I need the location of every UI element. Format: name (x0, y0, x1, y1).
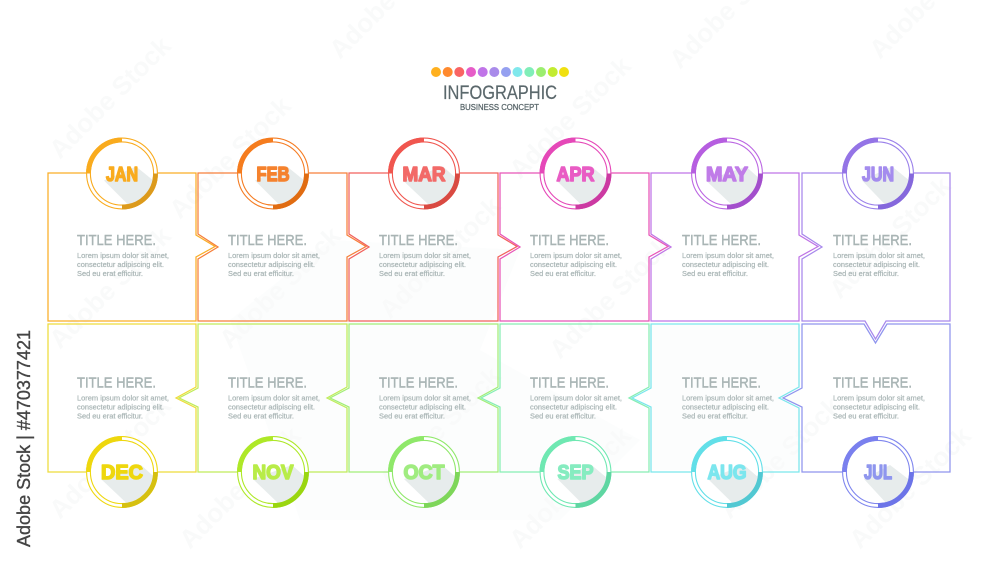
subtitle: BUSINESS CONCEPT (460, 102, 539, 112)
panel: MAR: Sed eu erat efficitur. (379, 269, 445, 278)
panel: JUL: Sed eu erat efficitur. (833, 412, 899, 420)
icon: MAY badge (691, 138, 763, 210)
panel: MAY: consectetur adipiscing elit. (682, 260, 769, 269)
panel: OCT: consectetur adipiscing elit. (379, 402, 466, 412)
icon: JUN badge (842, 138, 914, 210)
background watermark: Adobe Stock (373, 360, 507, 494)
panel: SEP: Lorem ipsum dolor sit amet, (530, 394, 622, 402)
panel: NOV: Lorem ipsum dolor sit amet, (228, 394, 320, 402)
background watermark: Adobe Stock (163, 90, 297, 224)
icon: DEC badge (86, 436, 158, 508)
icon: AUG badge (691, 436, 763, 508)
panel: FEB: Lorem ipsum dolor sit amet, (228, 251, 320, 260)
panel: JAN: consectetur adipiscing elit. (77, 260, 164, 269)
panel: AUG: Lorem ipsum dolor sit amet, (682, 394, 774, 402)
panel: APR: consectetur adipiscing elit. (530, 260, 617, 269)
panel: OCT: TITLE HERE. (379, 374, 458, 392)
panel: JUL: TITLE HERE. (833, 374, 912, 392)
background watermark: Adobe Stock (823, 170, 957, 304)
panel: FEB: TITLE HERE. (228, 232, 307, 249)
panel: FEB (198, 173, 366, 321)
panel: JAN: Sed eu erat efficitur. (77, 269, 143, 278)
background watermark: Adobe Stock (503, 420, 637, 554)
panel: SEP (481, 324, 649, 472)
icon: SEP badge: SEP (558, 462, 594, 484)
icon: MAR badge: MAR (402, 164, 446, 186)
icon: JUL badge (842, 436, 914, 508)
panel: NOV (179, 324, 347, 472)
icon: APR badge: APR (556, 164, 595, 186)
panel: MAR (349, 173, 517, 321)
icon: JAN badge (86, 138, 158, 210)
icon: DEC badge: DEC (101, 462, 143, 484)
background watermark: Adobe Stock (43, 390, 177, 524)
icon: MAR badge (388, 138, 460, 210)
icon: APR badge (540, 138, 612, 210)
panel: JAN (48, 173, 215, 321)
panel: MAY: TITLE HERE. (682, 232, 761, 249)
panel: APR (500, 173, 668, 321)
background watermark: Adobe Stock (843, 420, 977, 554)
icon: JUN badge: JUN (862, 164, 894, 186)
panel: APR: Lorem ipsum dolor sit amet, (530, 251, 622, 260)
panel: MAR: Lorem ipsum dolor sit amet, (379, 251, 471, 260)
panel: JUL (783, 324, 950, 472)
panel: NOV: consectetur adipiscing elit. (228, 402, 315, 412)
panel: JUL: consectetur adipiscing elit. (833, 402, 920, 412)
panel: JUL: Lorem ipsum dolor sit amet, (833, 394, 925, 402)
panel: MAY (651, 173, 818, 321)
panel: MAR: TITLE HERE. (379, 232, 458, 249)
background watermark: Adobe Stock (503, 50, 637, 184)
title: INFOGRAPHIC (443, 83, 557, 104)
panel: SEP: consectetur adipiscing elit. (530, 402, 617, 412)
panel: SEP: TITLE HERE. (530, 374, 609, 392)
icon: NOV badge (237, 436, 309, 508)
panel: JAN: TITLE HERE. (77, 232, 156, 249)
panel: AUG: Sed eu erat efficitur. (682, 412, 748, 420)
icon: NOV badge: NOV (252, 462, 294, 484)
colored dots row (431, 67, 569, 77)
panel: NOV: TITLE HERE. (228, 374, 307, 392)
panel: OCT: Sed eu erat efficitur. (379, 412, 445, 420)
icon: MAY badge: MAY (706, 164, 749, 186)
background watermark: Adobe Stock (173, 420, 307, 554)
panel: DEC: Lorem ipsum dolor sit amet, (77, 394, 169, 402)
panel: MAY: Sed eu erat efficitur. (682, 269, 748, 278)
panel: JUN: TITLE HERE. (833, 232, 912, 249)
background watermark: Adobe Stock (213, 220, 347, 354)
icon: OCT badge (388, 436, 460, 508)
panel: DEC (48, 324, 196, 472)
icon: AUG badge: AUG (708, 462, 746, 484)
panel: AUG (632, 324, 799, 472)
panel: FEB: consectetur adipiscing elit. (228, 260, 315, 269)
stock credit: Adobe Stock | #470377421 (14, 330, 34, 547)
icon: FEB badge: FEB (256, 164, 290, 186)
panel: DEC: Sed eu erat efficitur. (77, 412, 143, 420)
panel: MAY: Lorem ipsum dolor sit amet, (682, 251, 774, 260)
panel: AUG: consectetur adipiscing elit. (682, 402, 769, 412)
panel: FEB: Sed eu erat efficitur. (228, 269, 294, 278)
panel: JUN: Sed eu erat efficitur. (833, 269, 899, 278)
panel: OCT: Lorem ipsum dolor sit amet, (379, 394, 471, 402)
icon: SEP badge (540, 436, 612, 508)
icon: JUL badge: JUL (864, 462, 892, 484)
panel: AUG: TITLE HERE. (682, 374, 761, 392)
background watermark: Adobe Stock (713, 390, 847, 524)
icon: FEB badge (237, 138, 309, 210)
panel: APR: TITLE HERE. (530, 232, 609, 249)
panel: SEP: Sed eu erat efficitur. (530, 412, 596, 420)
background watermark: Adobe Stock (543, 230, 677, 364)
icon: JAN badge: JAN (106, 164, 138, 186)
panel: DEC: TITLE HERE. (77, 374, 156, 392)
background watermark: Adobe Stock (43, 220, 177, 354)
panel: JUN (802, 173, 950, 339)
icon: OCT badge: OCT (404, 462, 444, 484)
panel: DEC: consectetur adipiscing elit. (77, 402, 164, 412)
panel: JUN: consectetur adipiscing elit. (833, 260, 920, 269)
panel: MAR: consectetur adipiscing elit. (379, 260, 466, 269)
background watermark: Adobe Stock (373, 190, 507, 324)
background watermark: Adobe Stock (43, 30, 177, 164)
panel: NOV: Sed eu erat efficitur. (228, 412, 294, 420)
panel: APR: Sed eu erat efficitur. (530, 269, 596, 278)
panel: JAN: Lorem ipsum dolor sit amet, (77, 251, 169, 260)
panel: OCT (330, 324, 498, 472)
panel: JUN: Lorem ipsum dolor sit amet, (833, 251, 925, 260)
